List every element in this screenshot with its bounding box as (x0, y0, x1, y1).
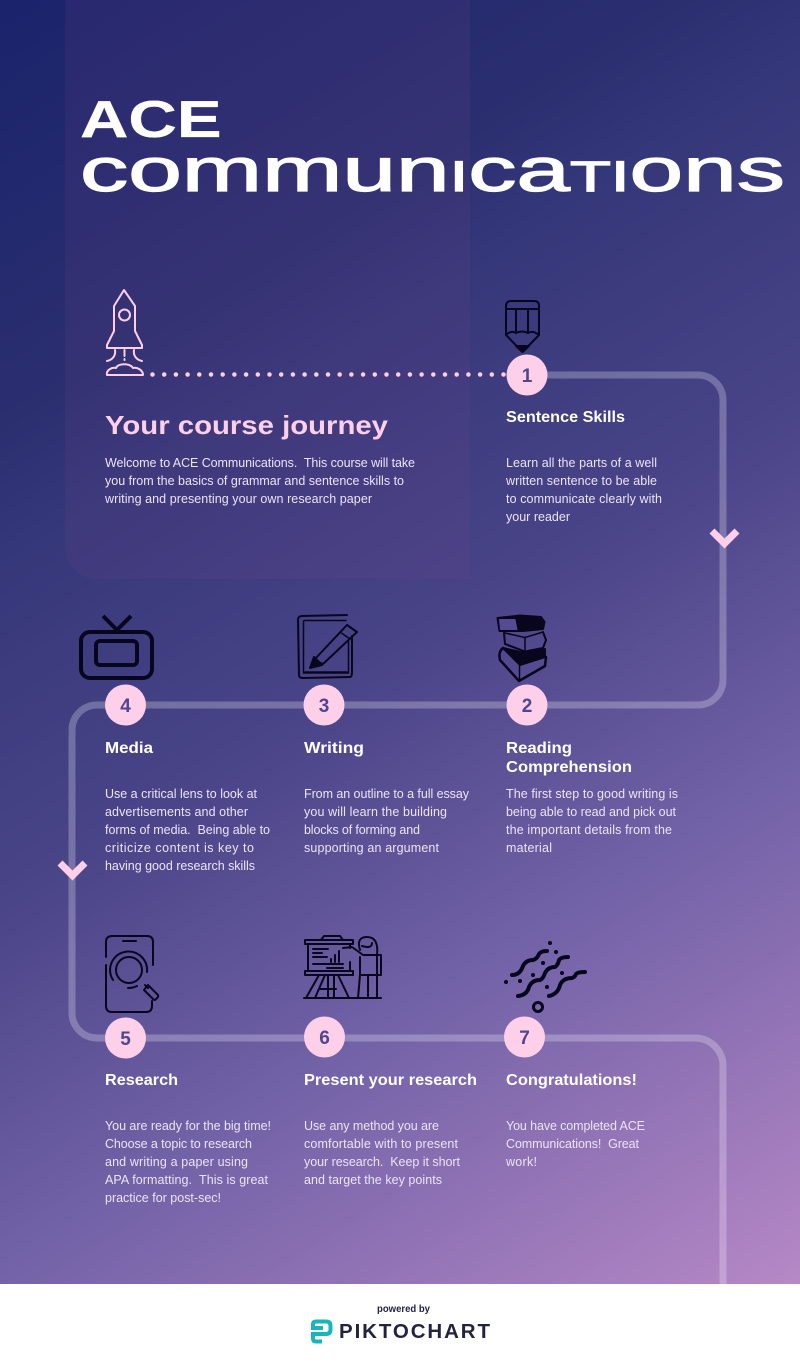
title: communications (80, 137, 785, 205)
step 4: media: Media (105, 740, 153, 757)
step 5: research: 5 (120, 1029, 131, 1050)
step 6: present your research: Use any method you are (304, 1119, 439, 1133)
step 5: research: Choose a topic to research (105, 1137, 252, 1151)
step 7: congratulations: You have completed ACE (506, 1119, 645, 1133)
step 3: writing: Writing (304, 740, 364, 757)
step 4: media: forms of media. Being able to (105, 823, 270, 837)
step 3: writing: 3 (319, 696, 329, 717)
icon: phone with magnifier (106, 936, 158, 1012)
step 7: congratulations: Communications! Great (506, 1137, 640, 1151)
step 1: sentence skills: your reader (506, 510, 570, 524)
step 2: reading comprehension: Reading (506, 740, 572, 757)
icon: pencil (506, 301, 539, 352)
step 7: congratulations: Congratulations! (506, 1072, 637, 1089)
step 6: present your research: your research. Keep it short (304, 1155, 461, 1169)
step 2: reading comprehension: The first step to good writing is (506, 787, 678, 801)
panel: intro backdrop (65, 0, 470, 579)
icon: rocket (107, 290, 143, 375)
text: intro: you from the basics of grammar and sentence skills to (105, 474, 404, 488)
step 4: media: having good research skills (105, 859, 255, 873)
step 1: sentence skills: 1 (522, 366, 533, 387)
step 3: writing (298, 615, 470, 855)
step 4: media: 4 (120, 696, 131, 717)
step 7: congratulations: 7 (519, 1028, 530, 1049)
dotted connector (152, 372, 510, 377)
step 5: research: practice for post-sec! (105, 1191, 221, 1205)
title: ACE (80, 90, 222, 148)
step 4: media: criticize content is key to (105, 841, 254, 855)
text: intro (104, 456, 415, 506)
step 1: sentence skills: Sentence Skills (506, 409, 625, 426)
footer: PIKTOCHART (339, 1320, 490, 1343)
arrow: left side chevron (60, 863, 85, 876)
icon: presenter at board (304, 936, 381, 998)
step 4: media: advertisements and other (105, 805, 248, 819)
step 6: present your research: comfortable with to present (304, 1137, 459, 1151)
step 1: sentence skills (505, 301, 662, 524)
icon: confetti (504, 941, 585, 1012)
text: intro: writing and presenting your own research paper (104, 492, 372, 506)
step 6: present your research: 6 (319, 1028, 330, 1049)
step 5: research (105, 936, 271, 1205)
title (80, 90, 785, 205)
step 2: reading comprehension: 2 (522, 696, 532, 717)
step 3: writing: From an outline to a full essay (304, 787, 470, 801)
step 5: research: Research (105, 1072, 178, 1089)
icon: books (498, 616, 546, 681)
step 1: sentence skills: written sentence to be able (505, 474, 657, 488)
heading: your course journey: Your course journey (105, 410, 389, 440)
step 4: media: Use a critical lens to look at (105, 787, 258, 801)
step 2: reading comprehension: material (506, 841, 552, 855)
step 3: writing: you will learn the building (304, 805, 447, 819)
step 6: present your research: Present your research (304, 1072, 477, 1089)
step 2: reading comprehension: the important details from the (506, 823, 672, 837)
icon: television (81, 616, 152, 678)
footer (0, 1284, 800, 1364)
step 7: congratulations: work! (505, 1155, 537, 1169)
text: intro: Welcome to ACE Communications. This course will take (105, 456, 415, 470)
step 2: reading comprehension: Comprehension (506, 759, 632, 776)
journey path line (72, 375, 723, 1284)
step 6: present your research: and target the key points (304, 1173, 442, 1187)
icon: sketched note and pen (298, 615, 357, 678)
footer: powered by (377, 1304, 430, 1315)
step 6: present your research (304, 936, 477, 1187)
step 1: sentence skills: to communicate clearly with (506, 492, 662, 506)
step 1: sentence skills: Learn all the parts of a well (506, 456, 657, 470)
icon: piktochart logo (313, 1322, 330, 1342)
step 5: research: and writing a paper using (105, 1155, 248, 1169)
arrow: right side chevron (712, 531, 737, 544)
step 2: reading comprehension: being able to read and pick out (506, 805, 677, 819)
step 5: research: You are ready for the big time! (105, 1119, 271, 1133)
step 3: writing: supporting an argument (304, 841, 440, 855)
step 3: writing: blocks of forming and (304, 823, 420, 837)
step 4: media (81, 616, 270, 873)
step 5: research: APA formatting. This is great (105, 1173, 269, 1187)
step 7: congratulations (504, 941, 645, 1169)
step 2: reading comprehension (498, 616, 678, 855)
